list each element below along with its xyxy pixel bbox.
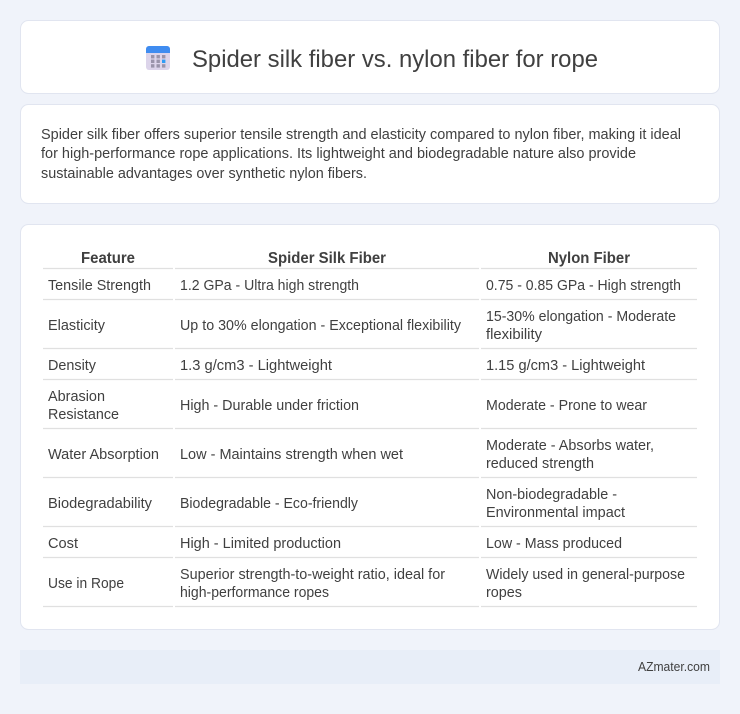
- icon: calendar grid: [146, 46, 170, 70]
- row: elasticity: 15-30% elongation - Moderate: [486, 309, 676, 325]
- row: use in rope: ropes: [486, 585, 522, 601]
- row: elasticity: flexibility: [486, 327, 543, 343]
- row: water absorption: Low - Maintains strength when wet: [180, 447, 403, 463]
- row: cost: Cost: [48, 536, 78, 552]
- title: Spider silk fiber vs. nylon fiber for rope: [192, 46, 598, 73]
- row: tensile strength: 0.75 - 0.85 GPa - High strength: [486, 278, 681, 294]
- row: abrasion resistance: Abrasion: [48, 389, 105, 405]
- row: use in rope: Use in Rope: [48, 576, 124, 592]
- intro paragraph: Spider silk fiber offers superior tensile strength and elasticity compared to nylon fiber, making it ideal: [41, 127, 681, 143]
- row: elasticity: Up to 30% elongation - Exceptional flexibility: [180, 318, 462, 334]
- row: cost: Low - Mass produced: [486, 536, 622, 552]
- row: biodegradability: Non-biodegradable -: [486, 487, 617, 503]
- row: density: [48, 358, 645, 374]
- row: biodegradability: Biodegradability: [48, 496, 153, 512]
- row: abrasion resistance: Resistance: [48, 407, 119, 423]
- row: use in rope: Widely used in general-purpose: [486, 567, 685, 583]
- row: cost: High - Limited production: [180, 536, 341, 552]
- row: use in rope: Superior strength-to-weight ratio, ideal for: [180, 567, 445, 583]
- row: density: 1.15 g/cm3 - Lightweight: [486, 358, 645, 374]
- table header: [81, 250, 630, 267]
- panel: intro text card: [20, 104, 720, 204]
- row: water absorption: Water Absorption: [48, 447, 159, 463]
- row: elasticity: Elasticity: [48, 318, 106, 334]
- table header: Feature: [81, 250, 135, 267]
- row: biodegradability: [48, 487, 625, 521]
- table header: Spider Silk Fiber: [268, 250, 386, 267]
- row: elasticity: [48, 309, 676, 343]
- panel: comparison table: [20, 224, 720, 630]
- intro paragraph: for high-performance rope applications. Its lightweight and biodegradable nature also provide: [41, 146, 636, 162]
- row: density: 1.3 g/cm3 - Lightweight: [180, 358, 332, 374]
- table header: Nylon Fiber: [548, 250, 630, 267]
- footer bar: AZmater.com: [638, 659, 710, 674]
- row: biodegradability: Biodegradable - Eco-friendly: [180, 496, 359, 512]
- panel: title card: [20, 20, 720, 94]
- row: abrasion resistance: Moderate - Prone to wear: [486, 398, 647, 414]
- row: water absorption: [48, 438, 654, 472]
- row: water absorption: Moderate - Absorbs water,: [486, 438, 654, 454]
- intro paragraph: sustainable advantages over synthetic nylon fibers.: [41, 166, 367, 182]
- row: use in rope: [48, 567, 685, 601]
- footer bar: [20, 650, 720, 684]
- row: abrasion resistance: [48, 389, 647, 423]
- row: cost: [48, 536, 622, 552]
- row: biodegradability: Environmental impact: [486, 505, 625, 521]
- row: tensile strength: Tensile Strength: [48, 278, 151, 294]
- row: tensile strength: [48, 278, 681, 294]
- row: density: Density: [48, 358, 97, 374]
- row: use in rope: high-performance ropes: [180, 585, 329, 601]
- row: abrasion resistance: High - Durable under friction: [180, 398, 359, 414]
- row: tensile strength: 1.2 GPa - Ultra high strength: [180, 278, 359, 294]
- intro paragraph: [41, 127, 681, 182]
- row: water absorption: reduced strength: [486, 456, 594, 472]
